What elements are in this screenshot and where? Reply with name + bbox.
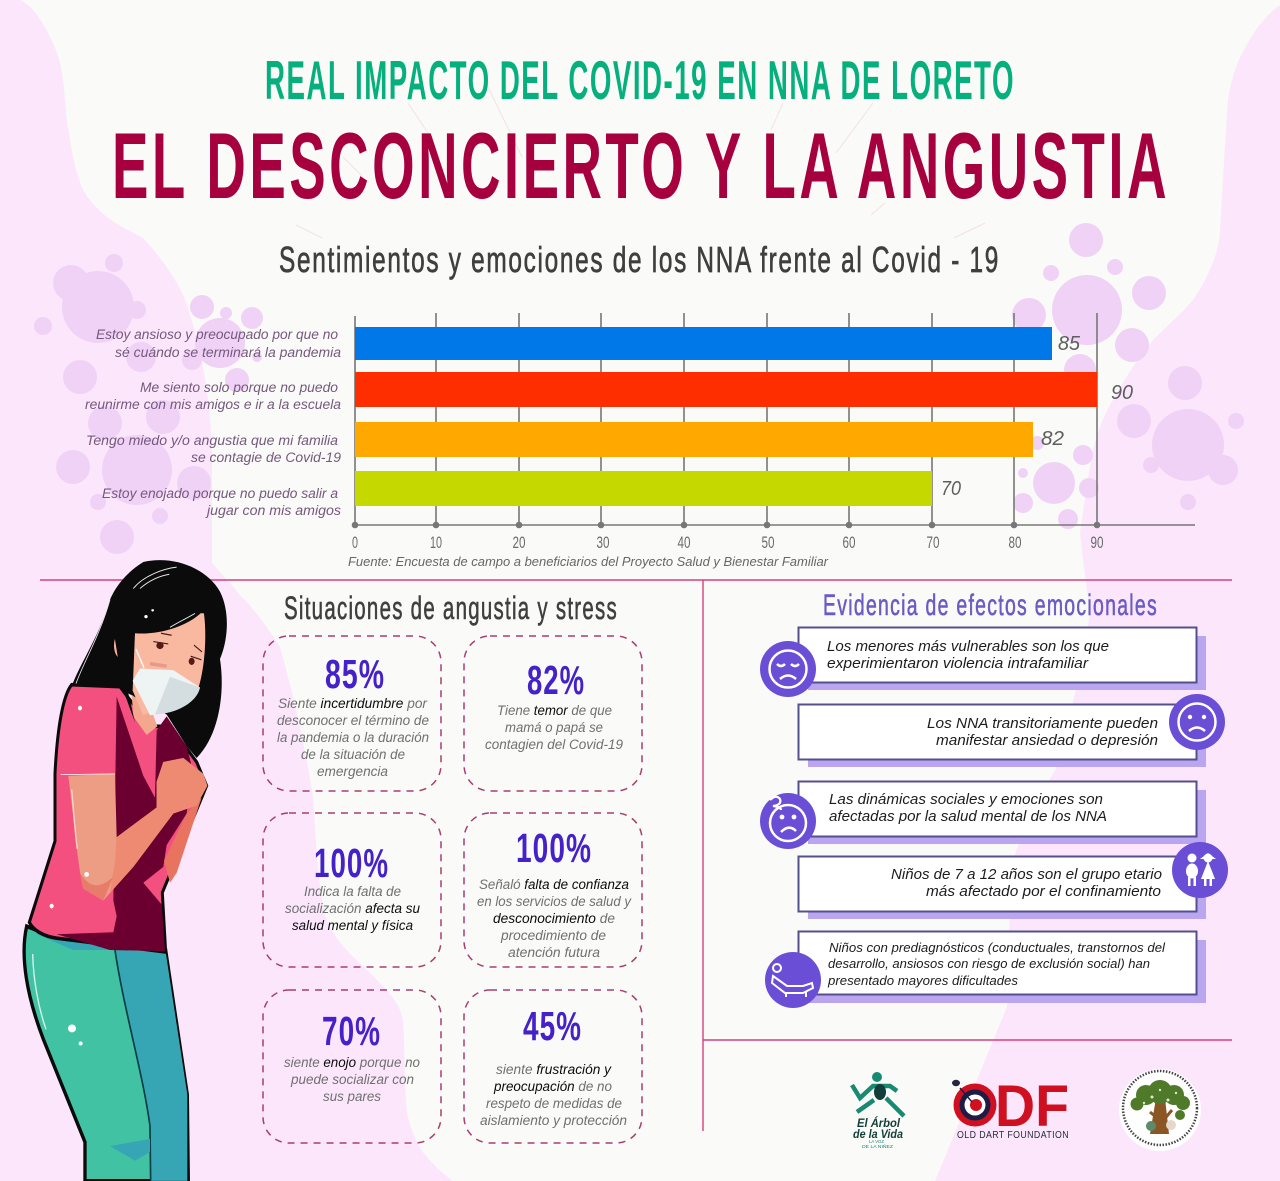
card: 85%: 85%: [325, 651, 385, 697]
axis tick labels: 70: [926, 534, 940, 552]
bar: 82 orange: [355, 422, 1033, 457]
evidence item 5: presentado mayores dificultades: [827, 973, 1018, 988]
card: 45%: siente frustración y: [496, 1062, 612, 1077]
face: [114, 613, 205, 715]
logo: el árbol de la vida: DE LA NIÑEZ: [862, 1143, 893, 1149]
card: 82%: 82%: [527, 657, 585, 703]
card: 70%: [263, 990, 441, 1143]
card: 45%: [464, 990, 642, 1143]
card: 85%: Siente incertidumbre por: [278, 696, 428, 711]
category labels: Estoy ansioso y preocupado por que no: [96, 327, 338, 342]
axis tick labels: 20: [512, 534, 526, 552]
evidence item 3: Las dinámicas sociales y emociones son: [829, 791, 1103, 808]
value labels: 70: [941, 478, 961, 500]
card: 100% socialización: salud mental y física: [292, 918, 413, 933]
value labels: 82: [1041, 428, 1064, 450]
bar chart: feelings and emotions: [85, 313, 1195, 552]
evidence item 3: afectadas por la salud mental de los NNA: [829, 808, 1107, 825]
evidence item 4: Niños de 7 a 12 años son el grupo etario: [891, 866, 1162, 883]
card: 100% confianza: 100%: [516, 825, 592, 871]
bar: 90 red: [355, 372, 1097, 407]
logo: old dart foundation: [952, 1074, 1069, 1141]
category labels: Me siento solo porque no puedo: [140, 380, 339, 395]
mask: [133, 649, 200, 715]
logo: el árbol de la vida: El Árbol: [857, 1117, 901, 1130]
value labels: 85: [1058, 333, 1081, 355]
evidence item 3: [760, 782, 1206, 849]
card: 100% confianza: Señaló falta de confianza: [479, 877, 629, 892]
logo: el árbol de la vida: de la Vida: [853, 1129, 904, 1141]
card: 45%: preocupación de no: [493, 1079, 612, 1094]
category labels: jugar con mis amigos: [205, 503, 341, 518]
card: 100% confianza: atención futura: [508, 945, 601, 960]
value labels: [941, 333, 1133, 500]
axis tick labels: 30: [596, 534, 610, 552]
logo: el árbol de la vida: [852, 1072, 904, 1149]
card: 100% socialización: Indica la falta de: [304, 884, 401, 899]
virus cluster background right: [1012, 223, 1244, 529]
card: 100% socialización: 100%: [314, 840, 389, 886]
axis tick labels: 60: [842, 534, 856, 552]
evidence item 4: [798, 842, 1228, 919]
card: 70%: 70%: [322, 1008, 381, 1054]
category labels: Tengo miedo y/o angustia que mi familia: [86, 433, 338, 448]
icon: sad face: [1169, 694, 1225, 750]
card: 85%: de la situación de: [301, 747, 405, 762]
neck: [132, 695, 157, 735]
evidence item 2: Los NNA transitoriamente pueden: [927, 715, 1158, 732]
evidence item 5: Niños con prediagnósticos (conductuales, transtornos del: [829, 940, 1166, 955]
icon: closed-eyes sad face: [760, 641, 816, 697]
icon: confused face: [760, 793, 816, 849]
logo: tree seal: [1119, 1069, 1201, 1151]
hair back: [71, 560, 227, 758]
category labels: Estoy enojado porque no puedo salir a: [102, 486, 338, 501]
arm and hands: [50, 706, 207, 908]
card: 100% socialización: [263, 813, 441, 967]
axis tick labels: 80: [1008, 534, 1022, 552]
evidence item 2: manifestar ansiedad o depresión: [936, 732, 1158, 749]
card: 100% confianza: desconocimiento de: [493, 911, 615, 926]
card: 100% confianza: [464, 813, 642, 967]
card: 100% confianza: procedimiento de: [500, 928, 606, 943]
card: 82%: mamá o papá se: [505, 720, 603, 735]
hair bangs: [113, 590, 208, 722]
card: 70%: puede socializar con: [290, 1072, 414, 1087]
axis tick labels: 10: [430, 534, 442, 552]
axis tick labels: [352, 534, 1104, 552]
card: 82%: [464, 636, 642, 791]
evidence item 2: [798, 694, 1225, 767]
axis tick labels: 50: [762, 534, 774, 552]
logo: old dart foundation: DF: [995, 1074, 1069, 1139]
icon: children: [1172, 842, 1228, 898]
logo: el árbol de la vida: LA VOZ: [869, 1139, 884, 1144]
card: 85%: desconocer el término de: [277, 713, 429, 728]
evidence item 4: más afectado por el confinamiento: [926, 883, 1161, 900]
virus cluster background left: [34, 254, 263, 554]
bar: 70 green: [355, 471, 932, 506]
axis tick labels: 90: [1090, 534, 1104, 552]
evidence item 1: Los menores más vulnerables son los que: [827, 638, 1109, 655]
category labels: [85, 327, 342, 518]
card: 82%: contagien del Covid-19: [485, 737, 623, 752]
evidence item 5: desarrollo, ansiosos con riesgo de exclusión social) han: [828, 956, 1150, 971]
value labels: 90: [1111, 382, 1133, 404]
card: 70%: siente enojo porque no: [284, 1055, 420, 1070]
category labels: se contagie de Covid-19: [191, 450, 342, 465]
card: 100% confianza: en los servicios de salud y: [477, 894, 632, 909]
card: 85%: la pandemia o la duración: [277, 730, 429, 745]
card: 85%: emergencia: [317, 764, 388, 779]
shirt: [29, 685, 207, 952]
heading: situaciones: Situaciones de angustia y stress: [284, 590, 618, 626]
card: 45%: aislamiento y protección: [480, 1113, 627, 1128]
evidence item 5: [765, 932, 1206, 1008]
axis tick labels: 40: [678, 534, 690, 552]
card: 70%: sus pares: [323, 1089, 381, 1104]
category labels: reunirme con mis amigos e ir a la escuela: [85, 397, 342, 412]
card: 100% socialización: socialización afecta su: [285, 901, 420, 916]
category labels: sé cuándo se terminará la pandemia: [115, 345, 341, 360]
card: 45%: 45%: [523, 1003, 582, 1049]
evidence item 1: [760, 628, 1206, 697]
illustration: girl with mask: [24, 560, 227, 1181]
logo: old dart foundation: OLD DART FOUNDATION: [957, 1129, 1069, 1141]
pants: [24, 926, 188, 1181]
card: 85%: [263, 636, 441, 791]
card: 82%: Tiene temor de que: [497, 703, 612, 718]
axis tick labels: 0: [352, 534, 358, 552]
card: 45%: respeto de medidas de: [486, 1096, 622, 1111]
icon: person on couch: [765, 952, 821, 1008]
source note: Fuente: Encuesta de campo a beneficiarios del Proyecto Salud y Bienestar Familiar: [348, 554, 829, 569]
evidence item 1: experimientaron violencia intrafamiliar: [827, 655, 1089, 672]
bar: 85 blue: [355, 327, 1052, 360]
